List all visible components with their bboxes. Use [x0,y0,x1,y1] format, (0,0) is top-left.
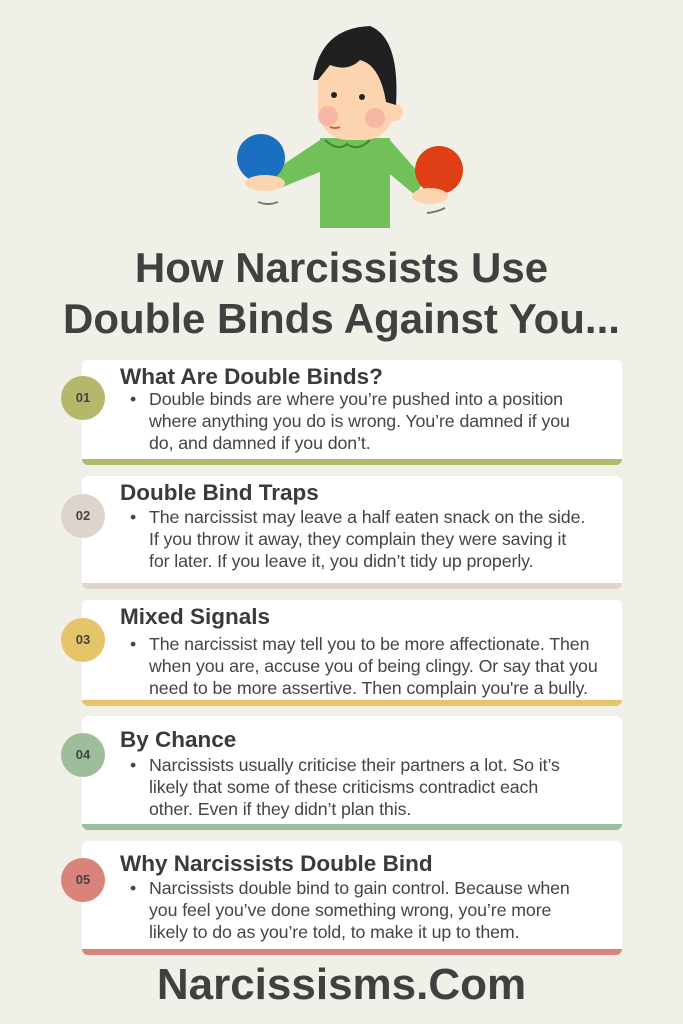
card 05: you feel you’ve done something wrong, you’re more [149,900,551,920]
card 02: Double Bind Traps [120,480,319,505]
card 05 [82,841,622,955]
card 01: do, and damned if you don’t. [149,433,371,453]
title [63,244,620,342]
badge 04: 04 [76,747,90,762]
badge 01: 01 [76,390,90,405]
card 03: need to be more assertive. Then complain you're a bully. [149,678,588,698]
card 04: Narcissists usually criticise their partners a lot. So it’s [149,755,560,775]
badge 03 [61,618,105,662]
badge 04 [61,733,105,777]
card 05: Narcissists double bind to gain control. Because when [149,878,570,898]
badge 03: 03 [76,632,90,647]
title: Double Binds Against You... [63,295,620,342]
badge 02: 02 [76,508,90,523]
card 02: If you throw it away, they complain they were saving it [149,529,566,549]
card 02 [82,476,622,589]
card 01: What Are Double Binds? [120,364,383,389]
card 04 [82,716,622,830]
card 01: where anything you do is wrong. You’re damned if you [149,411,570,431]
footer: site name: Narcissisms.Com [157,960,526,1009]
badge 02 [61,494,105,538]
badge 05: 05 [76,872,90,887]
card 05: likely to do as you’re told, to make it up to them. [149,922,519,942]
card 03: when you are, accuse you of being clingy. Or say that you [149,656,598,676]
card 03 [82,600,622,706]
badge 01 [61,376,105,420]
card 01 [82,360,622,465]
badge 05 [61,858,105,902]
title: How Narcissists Use [135,244,548,291]
card 03: The narcissist may tell you to be more affectionate. Then [149,634,589,654]
card 04: likely that some of these criticisms contradict each [149,777,538,797]
card 04: By Chance [120,727,236,752]
card 02: The narcissist may leave a half eaten snack on the side. [149,507,585,527]
card 01: Double binds are where you’re pushed into a position [149,389,563,409]
card 03: Mixed Signals [120,604,270,629]
card 05: Why Narcissists Double Bind [120,851,433,876]
illustration: man holding two balls [237,26,463,228]
card 02: for later. If you leave it, you didn’t tidy up properly. [149,551,533,571]
card 04: other. Even if they didn’t plan this. [149,799,411,819]
